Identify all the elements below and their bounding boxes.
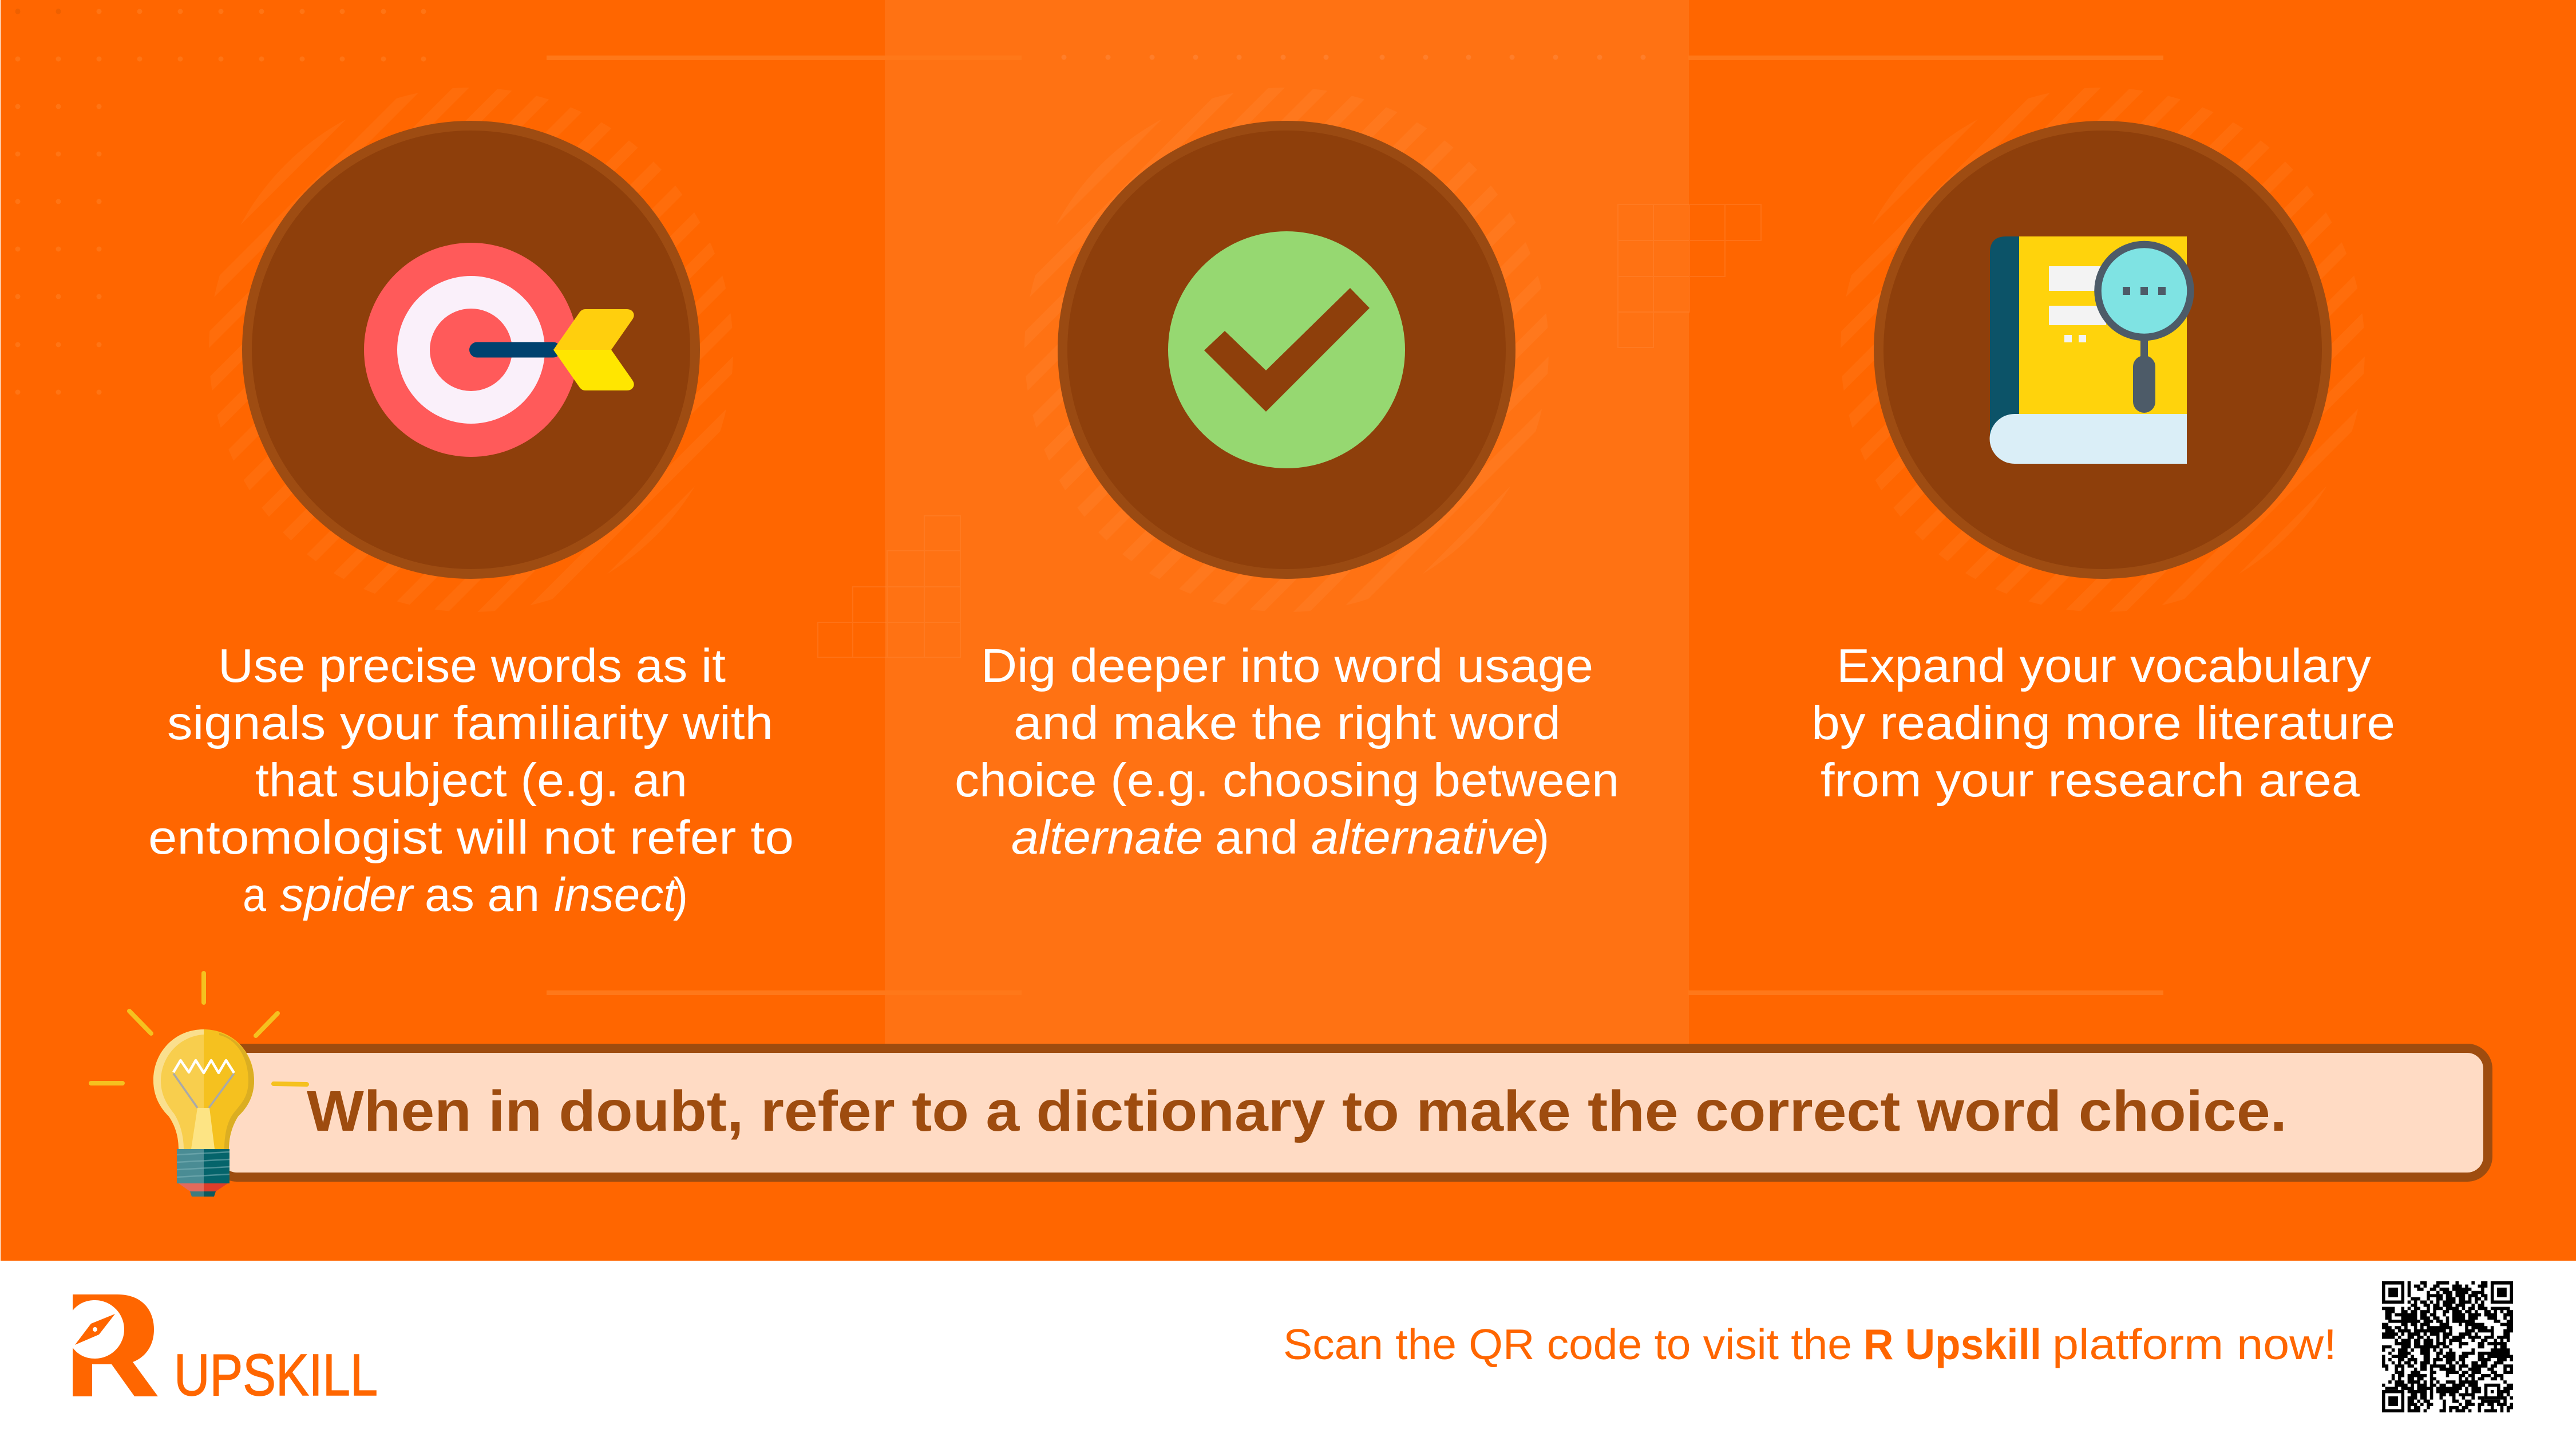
call to action text [1283, 1320, 2337, 1368]
text: precise words: ) [673, 868, 688, 921]
text: word usage: alternative [1311, 811, 1538, 864]
text: expand vocabulary: from your research area [1821, 753, 2360, 807]
badge circle: book [1878, 126, 2327, 574]
text: expand vocabulary: by reading more literature [1811, 696, 2395, 749]
text: precise words [148, 639, 794, 921]
text: word usage: ) [1534, 811, 1549, 864]
middle highlighted column [885, 0, 1689, 1044]
icon: target with dart [364, 243, 634, 457]
text: precise words: insect [554, 868, 678, 921]
QR code [2382, 1281, 2513, 1412]
banner text: When in doubt, refer to a dictionary to make the correct word choice. [307, 1079, 2287, 1143]
icon: glowing light bulb [91, 973, 307, 1197]
text: word usage: Dig deeper into word usage [981, 639, 1593, 692]
call to action text: Scan the QR code to visit the [1283, 1320, 1852, 1368]
panel: precise words [148, 88, 794, 921]
background dot pattern [15, 9, 1646, 395]
text: precise words: entomologist will not refer to [148, 811, 794, 864]
text: expand vocabulary [1811, 639, 2395, 807]
background rule lines [547, 56, 2163, 995]
text: word usage [955, 639, 1619, 864]
text: precise words: a [243, 868, 267, 921]
badge circle: check [1062, 126, 1511, 574]
logo: R Upskill: UPSKILL [174, 1342, 378, 1408]
text: word usage: alternate [1011, 811, 1203, 864]
text: precise words: that subject (e.g. an [255, 753, 687, 807]
text: word usage: and [1215, 811, 1298, 864]
text: precise words: spider [280, 868, 414, 921]
logo: R Upskill [73, 1294, 378, 1408]
text: expand vocabulary: Expand your vocabulary [1837, 639, 2372, 692]
callout banner [216, 1048, 2488, 1177]
background grid squares [818, 204, 1761, 657]
call to action text: R Upskill [1863, 1320, 2041, 1368]
text: precise words: as an [425, 868, 540, 921]
badge circle: target [247, 126, 695, 574]
panel: expand vocabulary [1811, 88, 2395, 807]
text: precise words: Use precise words as it [218, 639, 726, 692]
icon: book with magnifier [1989, 236, 2191, 464]
footer band [0, 1261, 2576, 1429]
text: word usage: choice (e.g. choosing between [955, 753, 1619, 807]
icon: green check mark [1168, 231, 1405, 468]
call to action text: platform now! [2052, 1320, 2337, 1368]
text: word usage: and make the right word [1014, 696, 1561, 749]
text: precise words: signals your familiarity with [167, 696, 773, 749]
panel: word usage [955, 88, 1619, 864]
